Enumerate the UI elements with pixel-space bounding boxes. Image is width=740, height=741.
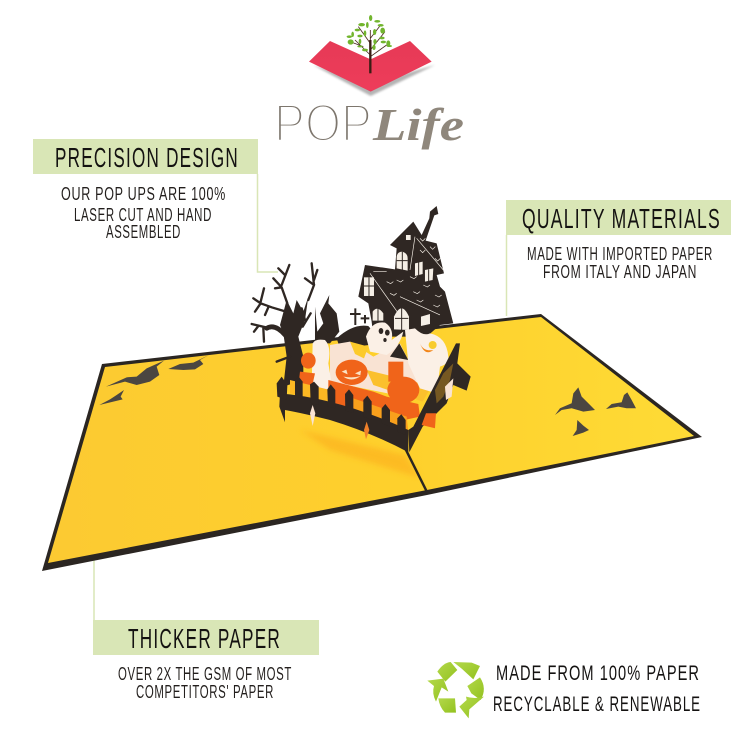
text block: OVER 2X THE GSM OF MOST bbox=[118, 664, 292, 684]
icon: red open book with tree bbox=[309, 15, 435, 96]
panel: precision design bbox=[33, 139, 258, 242]
connector: quality materials bbox=[506, 235, 508, 316]
yellow glimpses behind fence bbox=[290, 380, 333, 403]
text block bbox=[61, 184, 226, 242]
wordmark Life: Life bbox=[372, 99, 464, 150]
text block bbox=[527, 244, 713, 282]
pumpkins and orange layers bbox=[298, 353, 420, 422]
heading: THICKER PAPER bbox=[128, 623, 281, 654]
dragon silhouette bbox=[315, 295, 339, 343]
text block: ASSEMBLED bbox=[106, 222, 181, 242]
heading background bbox=[93, 620, 319, 655]
dead tree bbox=[252, 263, 317, 387]
bats: right page bbox=[555, 387, 636, 436]
card inside yellow bbox=[48, 317, 694, 563]
ghosts bbox=[312, 322, 449, 408]
connector: thicker paper bbox=[93, 560, 95, 621]
card back edge bbox=[42, 314, 702, 571]
connector: precision design bbox=[258, 174, 278, 272]
heading background bbox=[33, 139, 258, 174]
bats: left page bbox=[99, 355, 208, 405]
heading background bbox=[506, 200, 731, 235]
panel: quality materials bbox=[506, 200, 731, 282]
recycle badge bbox=[427, 662, 701, 718]
centre fold bbox=[405, 448, 428, 494]
text block: OUR POP UPS ARE 100% bbox=[61, 184, 226, 204]
pop-up scene bbox=[252, 206, 471, 452]
panel: thicker paper bbox=[93, 620, 319, 702]
orange tint under popup bbox=[300, 430, 420, 478]
heading: PRECISION DESIGN bbox=[55, 142, 239, 173]
panel: pop-up card illustration bbox=[42, 206, 702, 571]
haunted house bbox=[337, 206, 453, 348]
wordmark POP: POP bbox=[274, 94, 372, 153]
text block bbox=[493, 662, 701, 716]
back wall bbox=[330, 342, 432, 400]
text block: LASER CUT AND HAND bbox=[74, 205, 212, 225]
text block: COMPETITORS' PAPER bbox=[136, 682, 274, 702]
logo: Pop Life bbox=[274, 15, 464, 153]
text block bbox=[118, 664, 292, 702]
fence bbox=[277, 343, 471, 452]
icon: recycling arrows bbox=[427, 662, 484, 718]
